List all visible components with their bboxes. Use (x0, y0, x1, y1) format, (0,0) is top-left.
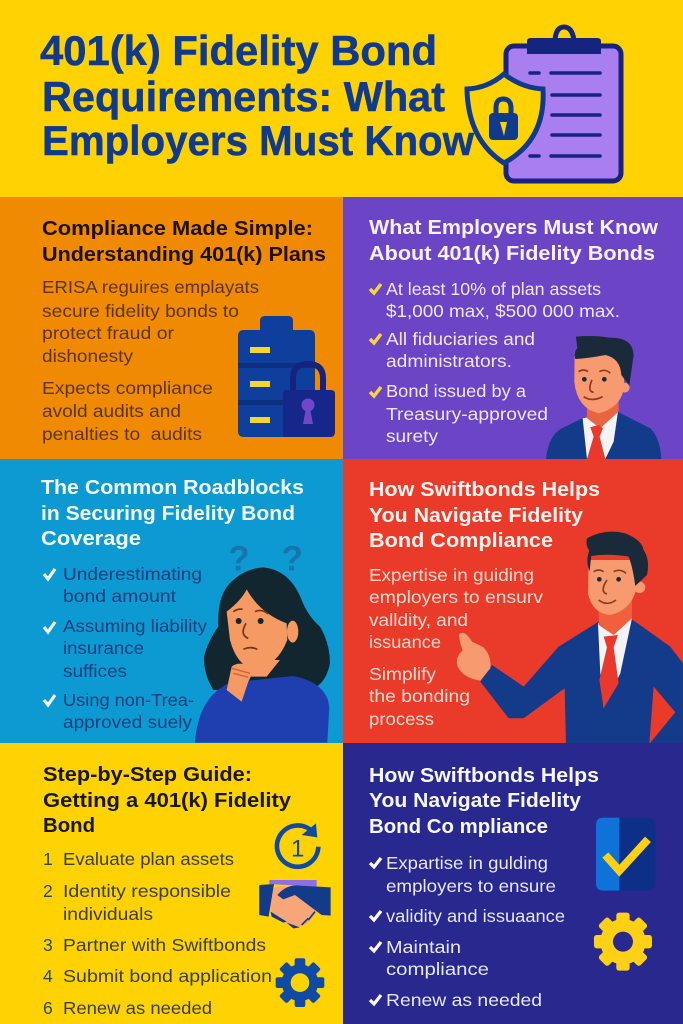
text: swiftbonds red body: issuance (369, 632, 441, 652)
heading: swiftbonds navy: You Navigate Fidelity (369, 789, 582, 812)
numbered list: steps: 4 (43, 966, 53, 986)
numbered list: steps: Evaluate plan assets (63, 849, 234, 869)
numbered list: steps: Submit bond application (63, 966, 272, 986)
checklist: employer requirements: $1,000 max, $500 000 max. (386, 301, 620, 321)
text: compliance body: penalties to audits (42, 424, 202, 444)
panel: common roadblocks (0, 459, 343, 743)
heading: what employers: What Employers Must Know (369, 216, 658, 239)
text: swiftbonds red body: employers to ensurv (369, 587, 543, 607)
numbered list: steps: individuals (63, 904, 153, 924)
panel: step-by-step guide (0, 743, 343, 1024)
checklist: employer requirements: Bond issued by a (386, 381, 526, 401)
checklist: swiftbonds navy: employers to ensure (386, 876, 556, 896)
text: swiftbonds red body: valldity, and (369, 610, 468, 630)
text: compliance body: protect fraud or (42, 323, 174, 343)
text: swiftbonds red body: process (369, 709, 434, 729)
illustration: worried woman with question marks: ? (228, 540, 250, 579)
numbered list: steps: 6 (43, 998, 53, 1018)
numbered list: steps (43, 849, 272, 1018)
icon: handshake (259, 880, 331, 929)
heading: swiftbonds red (369, 478, 600, 552)
text: swiftbonds red body: Simplify (369, 664, 436, 684)
heading: roadblocks: Coverage (41, 527, 141, 550)
checklist: roadblocks: insurance (63, 638, 144, 658)
illustration: smiling man in suit (546, 336, 661, 459)
numbered list: steps: Identity responsible (63, 881, 231, 901)
checklist: swiftbonds navy: compliance (386, 959, 489, 979)
numbered list: steps: Partner with Swiftbonds (63, 935, 266, 955)
icon: step-one refresh arrow (277, 823, 318, 867)
icon: step-one refresh arrow: 1 (291, 836, 304, 863)
checklist: swiftbonds navy: Expartise in gulding (386, 853, 548, 873)
icon: yellow gear (594, 913, 652, 971)
icon: file cabinet with padlock (238, 316, 335, 437)
title: Employers Must Know (42, 117, 474, 164)
heading: swiftbonds navy: Bond Co mpliance (369, 815, 548, 838)
checklist: roadblocks: bond amount (63, 586, 176, 606)
numbered list: steps: 2 (43, 881, 53, 901)
checklist: employer requirements: surety (386, 426, 438, 446)
checklist: employer requirements: All fiduciaries and (386, 329, 535, 349)
checklist: employer requirements (370, 279, 620, 446)
header background (0, 0, 683, 197)
checklist: swiftbonds navy: validity and issuaance (386, 906, 565, 926)
panel: how swiftbonds helps (red) (343, 459, 683, 744)
heading: roadblocks (41, 476, 304, 550)
heading: swiftbonds navy (369, 764, 599, 838)
text: swiftbonds red body: Expertise in guiding (369, 565, 534, 585)
checklist: roadblocks: Underestimating (63, 564, 202, 584)
checklist: swiftbonds navy (370, 853, 565, 1010)
title: Requirements: What (42, 73, 445, 120)
icon: clipboard with shield (467, 27, 621, 181)
checklist: swiftbonds navy: Renew as needed (386, 990, 542, 1010)
heading: compliance (42, 217, 326, 266)
text: compliance body: dishonesty (42, 346, 133, 366)
checklist: swiftbonds navy: Maintain (386, 937, 461, 957)
text: compliance body: ERISA reguires emplayats (42, 277, 259, 297)
text: compliance body (42, 277, 259, 444)
checklist: employer requirements: administrators. (386, 351, 512, 371)
heading: swiftbonds red: How Swiftbonds Helps (369, 478, 600, 501)
checklist: employer requirements: At least 10% of plan assets (386, 279, 601, 299)
numbered list: steps: 3 (43, 935, 53, 955)
heading: step-by-step: Step-by-Step Guide: (43, 763, 252, 786)
heading: swiftbonds red: Bond Compliance (369, 529, 553, 552)
panel: how swiftbonds helps (navy) (343, 743, 683, 1024)
heading: roadblocks: in Securing Fidelity Bond (41, 502, 295, 525)
checklist: roadblocks: Using non-Trea- (63, 690, 194, 710)
heading: compliance: Understanding 401(k) Plans (42, 243, 326, 266)
heading: roadblocks: The Common Roadblocks (41, 476, 304, 499)
heading: step-by-step: Bond (43, 814, 95, 837)
illustration: man pointing with thumb (457, 532, 683, 744)
illustration: worried woman with question marks: ? (282, 540, 303, 579)
checklist: roadblocks (44, 564, 207, 732)
numbered list: steps: 1 (43, 849, 53, 869)
heading: swiftbonds red: You Navigate Fidelity (369, 504, 584, 527)
heading: step-by-step (43, 763, 292, 837)
icon: blue gear (276, 958, 324, 1007)
heading: step-by-step: Getting a 401(k) Fidelity (43, 789, 292, 812)
checklist: roadblocks: Assuming liability (63, 616, 207, 636)
checklist: roadblocks: approved suely (63, 712, 192, 732)
text: compliance body: Expects compliance (42, 378, 213, 398)
heading: compliance: Compliance Made Simple: (42, 217, 313, 240)
heading: what employers: About 401(k) Fidelity Bonds (369, 242, 655, 265)
text: compliance body: secure fidelity bonds to (42, 301, 239, 321)
heading: swiftbonds navy: How Swiftbonds Helps (369, 764, 599, 787)
title: 401(k) Fidelity Bond (40, 27, 437, 74)
heading: what employers (369, 216, 658, 265)
text: swiftbonds red body: the bonding (369, 686, 470, 706)
title (40, 27, 474, 164)
icon: check tile (596, 818, 655, 891)
checklist: employer requirements: Treasury-approved (386, 404, 548, 424)
panel: compliance made simple (0, 197, 343, 459)
illustration: worried woman with question marks (195, 540, 330, 743)
numbered list: steps: Renew as needed (63, 998, 212, 1018)
text: compliance body: avold audits and (42, 401, 181, 421)
panel: what employers must know (343, 197, 683, 459)
checklist: roadblocks: suffices (63, 661, 127, 681)
text: swiftbonds red body (369, 565, 543, 729)
